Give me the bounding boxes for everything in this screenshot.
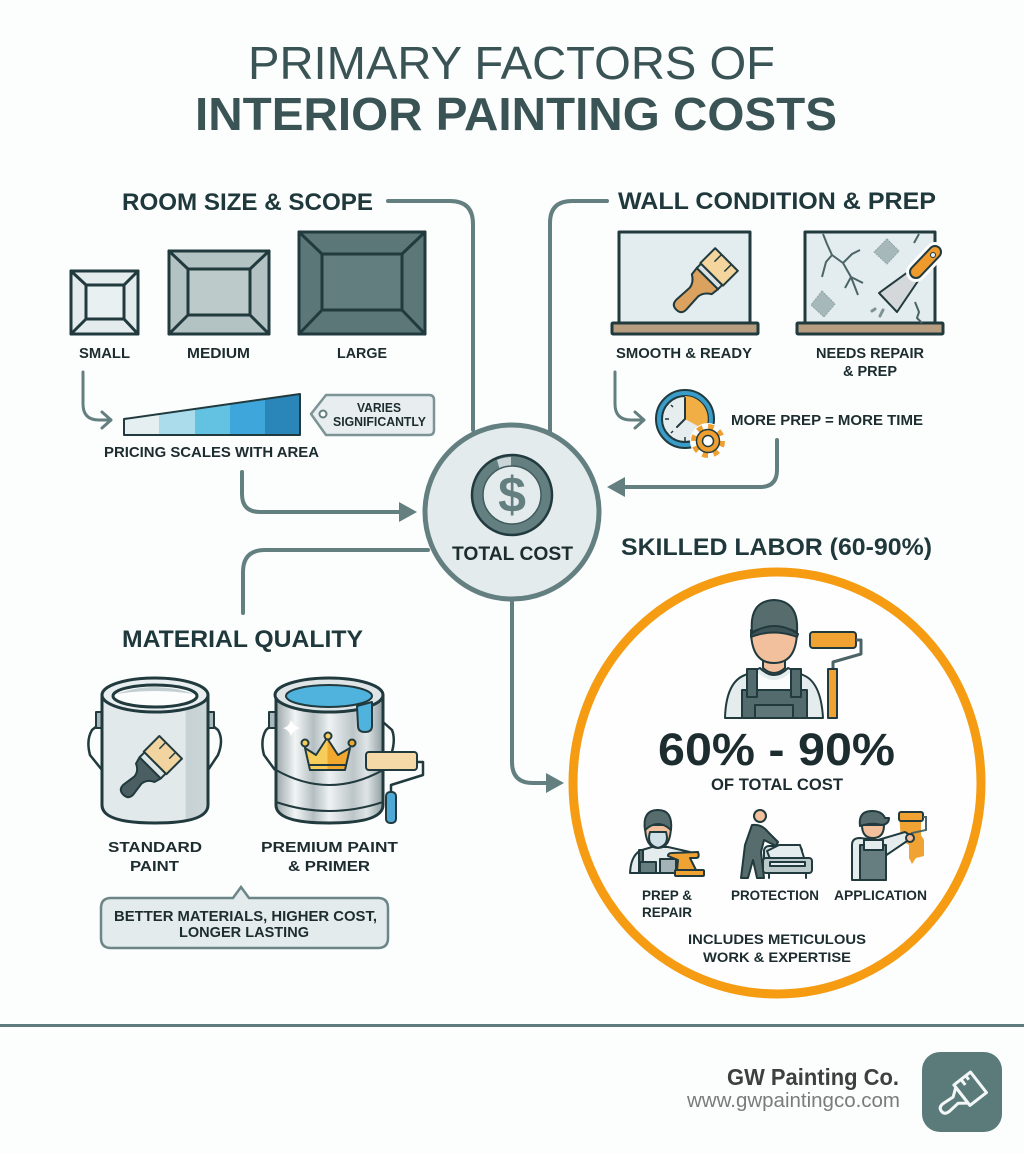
callout: better materials: BETTER MATERIALS, HIGHER COST, — [114, 908, 377, 925]
icon: medium room — [169, 251, 269, 334]
icon: company logo — [922, 1052, 1002, 1132]
total cost hub — [425, 425, 599, 599]
icon: clock and gear — [656, 390, 726, 459]
footer: company name and url — [686, 1064, 900, 1112]
note: meticulous work: INCLUDES METICULOUS — [688, 931, 866, 947]
label: prep and repair: PREP & — [642, 887, 692, 903]
footer: company name and url: www.gwpaintingco.com — [686, 1090, 900, 1112]
label: more prep more time: MORE PREP = MORE TIME — [731, 412, 923, 429]
label: smooth and ready: SMOOTH & READY — [616, 345, 752, 362]
connector: material quality to total cost — [243, 550, 428, 613]
note: meticulous work: WORK & EXPERTISE — [703, 949, 851, 965]
footer: company name and url: GW Painting Co. — [727, 1064, 899, 1090]
label: prep and repair — [642, 887, 692, 920]
label: needs repair and prep — [816, 345, 924, 380]
panel: wall condition and prep — [612, 188, 943, 459]
label: medium: MEDIUM — [187, 345, 250, 362]
label: of total cost: OF TOTAL COST — [711, 775, 844, 794]
heading: material quality: MATERIAL QUALITY — [122, 626, 363, 653]
label: protection: PROTECTION — [731, 887, 819, 903]
title: INTERIOR PAINTING COSTS — [195, 88, 837, 140]
note: meticulous work — [688, 931, 866, 965]
tag: varies significantly: SIGNIFICANTLY — [333, 415, 427, 429]
label: premium paint and primer: & PRIMER — [288, 858, 370, 875]
icon: small room — [71, 271, 138, 334]
arrow: prep time to total cost — [607, 440, 777, 497]
icon: application worker painting wall — [852, 811, 926, 880]
arrow: size to price scale — [83, 372, 111, 428]
label: pricing scales: PRICING SCALES WITH AREA — [104, 444, 319, 461]
label: standard paint: PAINT — [130, 858, 179, 875]
label: total cost: TOTAL COST — [452, 544, 573, 565]
label: application: APPLICATION — [834, 887, 927, 903]
footer divider — [0, 1024, 1024, 1027]
connector: wall condition to total cost — [550, 201, 607, 432]
label: premium paint and primer: PREMIUM PAINT — [261, 839, 398, 856]
icon: smooth wall — [612, 232, 758, 334]
label: large: LARGE — [337, 345, 387, 362]
icon: large room — [299, 232, 425, 334]
label: standard paint: STANDARD — [108, 839, 202, 856]
arrow: prep to time — [615, 372, 644, 428]
heading: room size: ROOM SIZE & SCOPE — [122, 189, 373, 216]
label: prep and repair: REPAIR — [642, 904, 692, 920]
heading: skilled labor: SKILLED LABOR (60-90%) — [621, 534, 932, 561]
title — [195, 37, 837, 140]
label: small: SMALL — [79, 345, 130, 362]
label: needs repair and prep: & PREP — [843, 363, 897, 380]
connector: room size to total cost — [388, 201, 473, 430]
icon: dollar coin — [472, 455, 552, 535]
title: PRIMARY FACTORS OF — [248, 37, 775, 89]
chart: pricing wedge — [124, 394, 300, 435]
label: standard paint — [108, 839, 202, 875]
stat: 60 to 90 percent: 60% - 90% — [658, 724, 895, 775]
icon: prep and repair worker — [630, 810, 704, 876]
icon: protection worker covering sofa — [741, 810, 812, 878]
panel: skilled labor — [573, 534, 981, 994]
icon: dollar coin: $ — [498, 467, 526, 523]
connector: total cost to skilled labor — [512, 600, 548, 783]
icon: painter with roller — [725, 600, 861, 718]
label: premium paint and primer — [261, 839, 398, 875]
tag: varies significantly: VARIES — [357, 401, 401, 415]
icon: premium paint can — [262, 678, 423, 823]
callout: better materials: LONGER LASTING — [179, 924, 309, 941]
orange ring — [573, 572, 981, 994]
arrow: pricing to total cost — [242, 472, 417, 522]
panel: material quality — [88, 626, 423, 948]
heading: wall condition: WALL CONDITION & PREP — [618, 188, 936, 215]
panel: room size and scope — [71, 189, 434, 461]
icon: damaged wall with scraper — [797, 232, 943, 334]
icon: standard paint can — [88, 678, 221, 823]
tag: varies significantly — [311, 395, 434, 435]
label: needs repair and prep: NEEDS REPAIR — [816, 345, 924, 362]
callout: better materials — [101, 887, 388, 948]
arrowhead: skilled labor — [546, 773, 564, 793]
